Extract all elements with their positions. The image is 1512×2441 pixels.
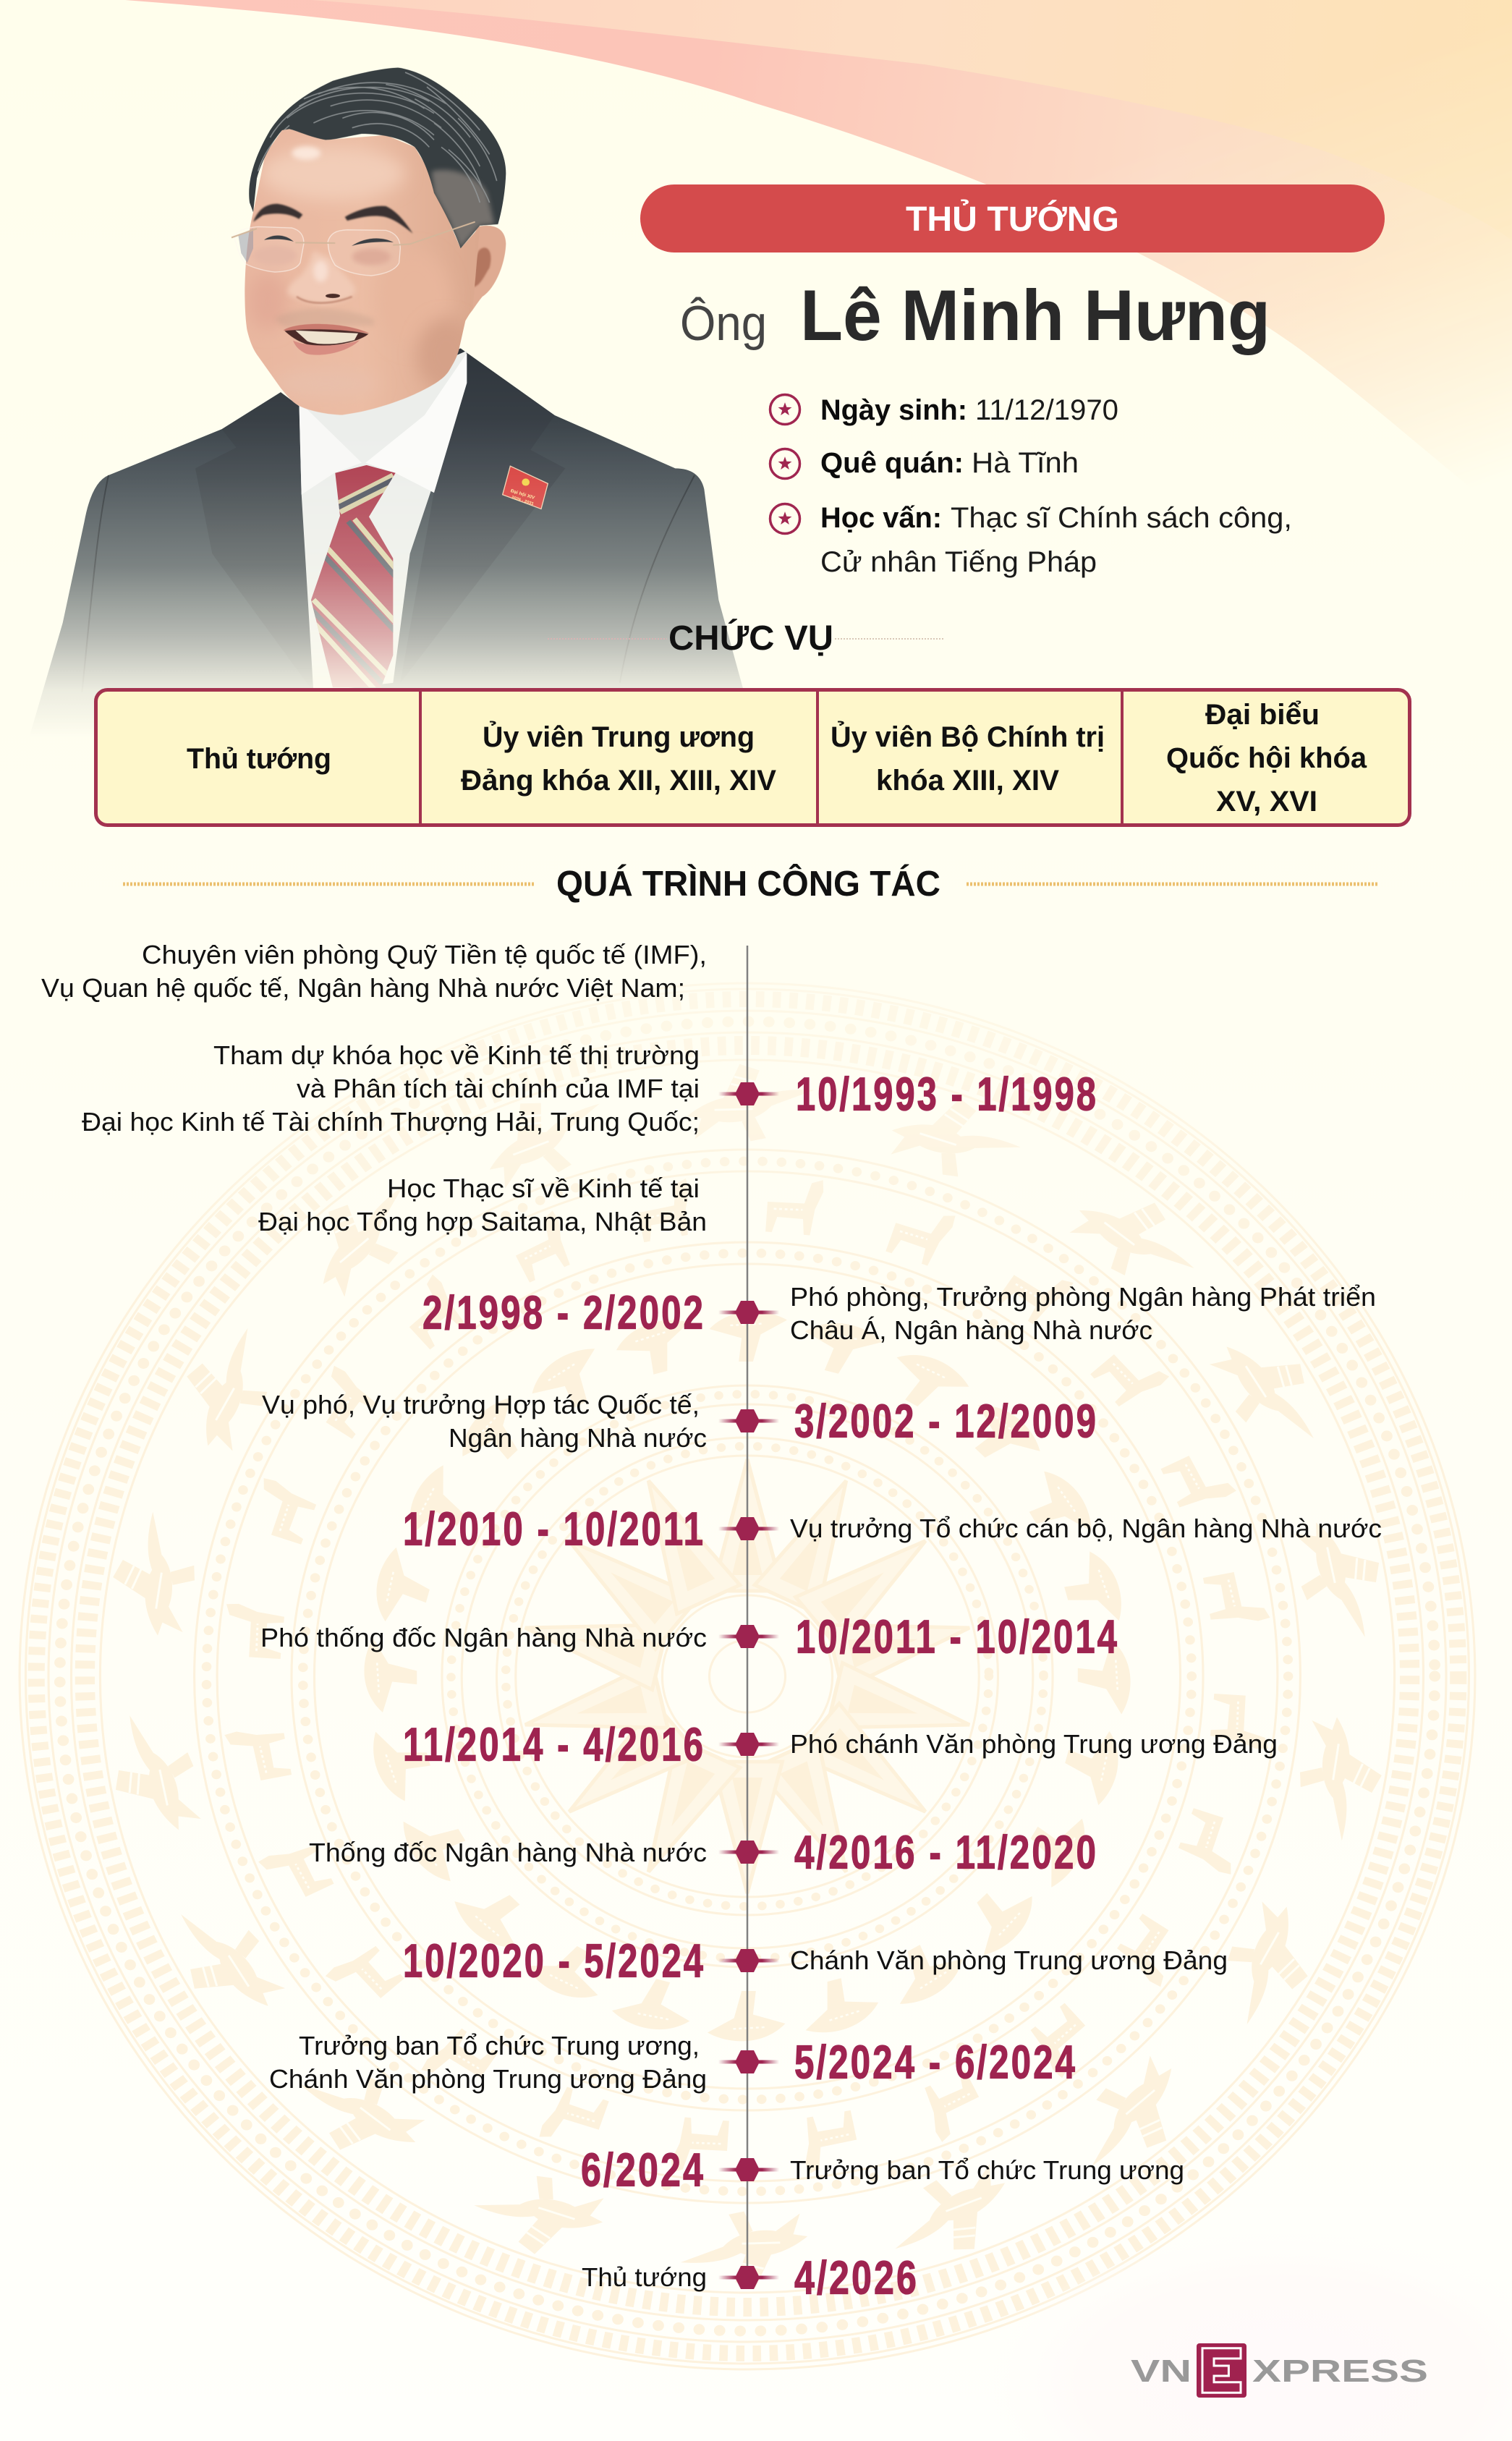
- suit: [29, 349, 757, 738]
- entry: 6/2024: [581, 2143, 1184, 2196]
- party pin: [503, 466, 548, 509]
- entry: 10/1993 - 1/1998: [82, 1040, 1098, 1137]
- mouth: [284, 324, 370, 355]
- cell: national assembly: [1166, 699, 1367, 818]
- shirt: [299, 351, 467, 692]
- party pin: Đại hội XIV: [510, 488, 536, 501]
- entry: IMF specialist intro text: Vụ Quan hệ quốc tế, Ngân hàng Nhà nước Việt Nam;: [41, 973, 685, 1003]
- positions table: [95, 689, 1409, 825]
- entry: Saitama study: Đại học Tổng hợp Saitama, Nhật Bản: [258, 1207, 707, 1236]
- hometown: [820, 447, 1079, 479]
- entry: 5/2024 - 6/2024: [269, 2031, 1077, 2094]
- personal details: [770, 394, 1292, 578]
- cell: central committee: [461, 720, 776, 797]
- entry: 3/2002 - 12/2009: [262, 1390, 1098, 1453]
- VnExpress logo: VN: [1131, 2353, 1192, 2389]
- entry: 2/1998 - 2/2002: Châu Á, Ngân hàng Nhà nước: [790, 1315, 1152, 1345]
- heading: career history: QUÁ TRÌNH CÔNG TÁC: [556, 864, 940, 904]
- collar: [299, 402, 362, 495]
- bronze drum background pattern: [20, 983, 1475, 2369]
- ear: [469, 226, 506, 315]
- title pill: [640, 184, 1385, 252]
- tie: [311, 464, 395, 687]
- cell: national assembly: XV, XVI: [1216, 786, 1317, 818]
- entry: 4/2016 - 11/2020: Thống đốc Ngân hàng Nhà nước: [309, 1838, 707, 1867]
- entry: IMF specialist intro text: [41, 940, 707, 1003]
- hometown: Hà Tĩnh: [972, 447, 1079, 479]
- icon: star bullet birth date: [770, 395, 800, 424]
- party pin: 2026 - 2031: [511, 496, 535, 506]
- timeline axis: [747, 946, 748, 2277]
- head: [232, 67, 506, 415]
- glasses: [232, 222, 475, 276]
- entry: 11/2014 - 4/2016: 11/2014 - 4/2016: [403, 1718, 705, 1771]
- education: [820, 502, 1292, 578]
- cell: central committee: Đảng khóa XII, XIII, XIV: [461, 765, 776, 797]
- soft blob behind logo: [991, 2232, 1512, 2441]
- entry: 3/2002 - 12/2009: Ngân hàng Nhà nước: [449, 1423, 707, 1453]
- entry: 10/2011 - 10/2014: [260, 1610, 1119, 1663]
- entry: 10/2020 - 5/2024: [403, 1935, 1228, 1987]
- birth date: 11/12/1970: [975, 394, 1118, 426]
- entry: 4/2016 - 11/2020: [309, 1826, 1098, 1878]
- cell: politburo: khóa XIII, XIV: [876, 765, 1059, 797]
- icon: star bullet education: [770, 504, 800, 534]
- entry: Saitama study: Học Thạc sĩ về Kinh tế tại: [387, 1173, 700, 1203]
- entry: 2/1998 - 2/2002: Phó phòng, Trưởng phòng Ngân hàng Phát triển: [790, 1282, 1376, 1312]
- education: Thạc sĩ Chính sách công,: [951, 502, 1292, 534]
- entry: 4/2016 - 11/2020: 4/2016 - 11/2020: [794, 1826, 1098, 1878]
- VnExpress logo: [1131, 2343, 1428, 2398]
- nose: [288, 251, 356, 305]
- entry: 4/2026: 4/2026: [794, 2251, 919, 2304]
- face: [245, 129, 480, 415]
- entry: 10/2020 - 5/2024: 10/2020 - 5/2024: [403, 1935, 705, 1987]
- birth date: Ngày sinh:: [820, 394, 967, 426]
- entry: 5/2024 - 6/2024: Chánh Văn phòng Trung ương Đảng: [269, 2064, 707, 2094]
- entry: 10/1993 - 1/1998: Đại học Kinh tế Tài chính Thượng Hải, Trung Quốc;: [82, 1107, 700, 1137]
- entry: 6/2024: 6/2024: [581, 2143, 705, 2196]
- entry: 4/2026: [582, 2251, 919, 2304]
- entry: 10/1993 - 1/1998: và Phân tích tài chính của IMF tại: [297, 1074, 700, 1103]
- cell: central committee: Ủy viên Trung ương: [483, 720, 755, 753]
- entry: Saitama study: [258, 1173, 707, 1236]
- hair: [249, 67, 506, 248]
- entry: 1/2010 - 10/2011: 1/2010 - 10/2011: [403, 1502, 705, 1555]
- VnExpress logo: XPRESS: [1252, 2353, 1428, 2389]
- entry: 3/2002 - 12/2009: 3/2002 - 12/2009: [794, 1395, 1098, 1447]
- entry: 3/2002 - 12/2009: Vụ phó, Vụ trưởng Hợp tác Quốc tế,: [262, 1390, 700, 1419]
- entry: 10/1993 - 1/1998: 10/1993 - 1/1998: [796, 1068, 1098, 1120]
- education: Học vấn:: [820, 502, 942, 534]
- entry: 2/1998 - 2/2002: 2/1998 - 2/2002: [422, 1286, 705, 1338]
- entry: 5/2024 - 6/2024: 5/2024 - 6/2024: [794, 2036, 1077, 2088]
- title pill: THỦ TƯỚNG: [906, 199, 1119, 239]
- entry: 5/2024 - 6/2024: Trưởng ban Tổ chức Trung ương,: [299, 2031, 700, 2060]
- cell: politburo: Ủy viên Bộ Chính trị: [831, 720, 1105, 753]
- entry: 6/2024: Trưởng ban Tổ chức Trung ương: [790, 2155, 1184, 2185]
- entry: 2/1998 - 2/2002: [422, 1282, 1376, 1345]
- entry: IMF specialist intro text: Chuyên viên phòng Quỹ Tiền tệ quốc tế (IMF),: [142, 940, 707, 969]
- heading: positions: CHỨC VỤ: [668, 618, 833, 658]
- birth date: [820, 394, 1118, 426]
- hometown: Quê quán:: [820, 447, 964, 479]
- lapels: [197, 392, 307, 587]
- eyes: [264, 235, 394, 246]
- entry: 1/2010 - 10/2011: Vụ trưởng Tổ chức cán bộ, Ngân hàng Nhà nước: [790, 1514, 1382, 1543]
- entry: 10/1993 - 1/1998: Tham dự khóa học về Kinh tế thị trường: [213, 1040, 700, 1070]
- cell: politburo: [831, 720, 1105, 797]
- cell: national assembly: Đại biểu: [1205, 699, 1320, 731]
- entry: 10/2011 - 10/2014: 10/2011 - 10/2014: [796, 1610, 1119, 1663]
- education: Cử nhân Tiếng Pháp: [820, 546, 1097, 578]
- entry: 1/2010 - 10/2011: [403, 1502, 1382, 1555]
- name heading: Ông: [680, 296, 767, 351]
- entry: 10/2020 - 5/2024: Chánh Văn phòng Trung ương Đảng: [790, 1945, 1228, 1975]
- entry: 4/2026: Thủ tướng: [582, 2262, 707, 2292]
- entry: 11/2014 - 4/2016: Phó chánh Văn phòng Trung ương Đảng: [790, 1729, 1278, 1759]
- decorative top-right arcs: [126, 0, 1512, 451]
- entry: 11/2014 - 4/2016: [403, 1718, 1278, 1771]
- name heading: Lê Minh Hưng: [800, 275, 1270, 355]
- eyebrows: [253, 204, 413, 234]
- icon: star bullet hometown: [770, 449, 800, 479]
- cell: national assembly: Quốc hội khóa: [1166, 742, 1367, 774]
- cell: prime minister: Thủ tướng: [187, 743, 331, 775]
- portrait illustration: [29, 67, 757, 738]
- entry: 10/2011 - 10/2014: Phó thống đốc Ngân hàng Nhà nước: [260, 1623, 707, 1652]
